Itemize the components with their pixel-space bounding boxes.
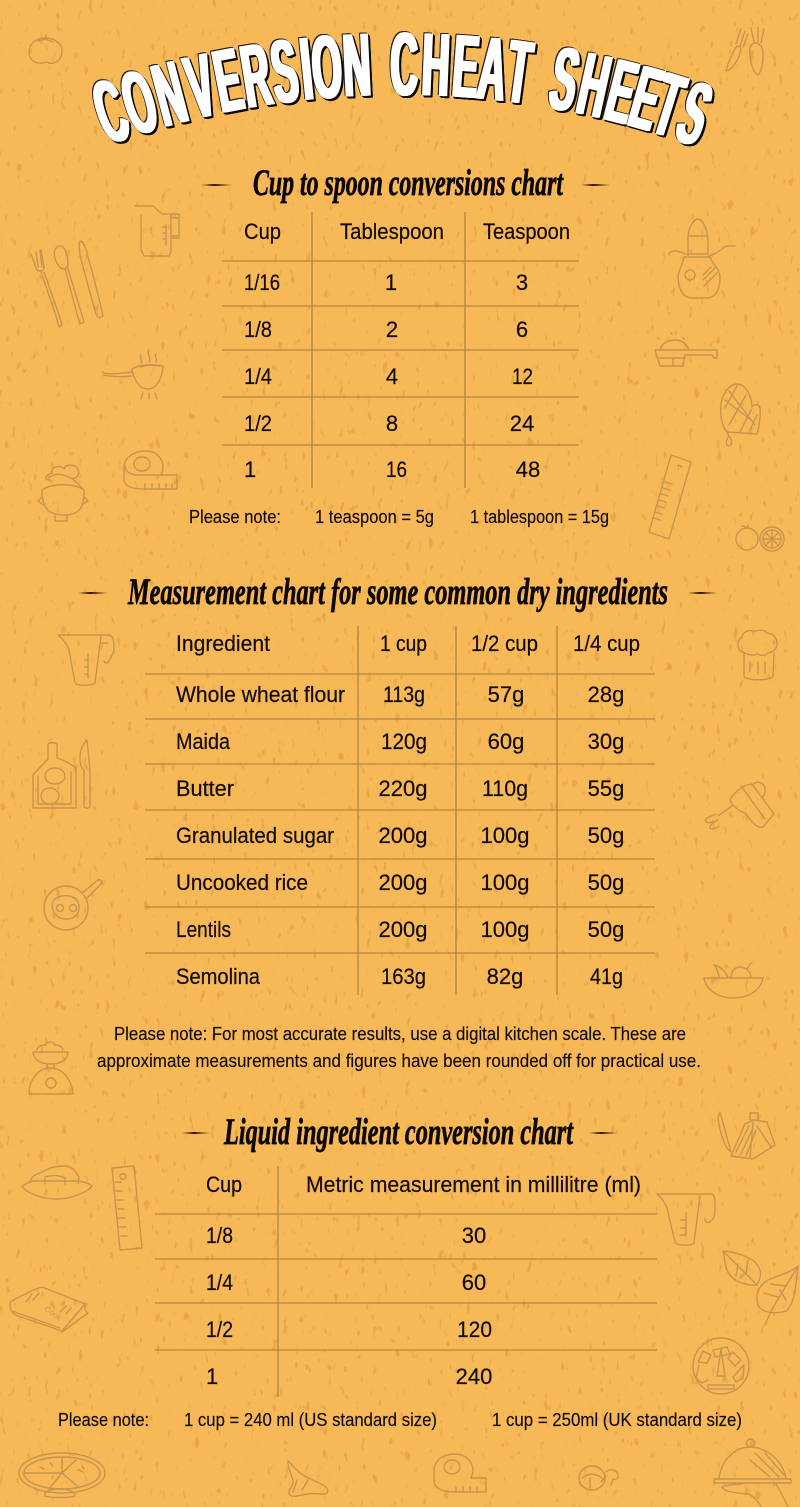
- table: cup to spoon: 16: [386, 457, 407, 482]
- heading: liquid ingredients: Liquid ingredient conversion chart: [223, 1112, 574, 1153]
- table: cup to spoon: [222, 212, 579, 488]
- title: N: [144, 42, 196, 146]
- table: dry ingredients: 100g: [481, 870, 529, 895]
- table: cup to spoon: 6: [516, 317, 528, 342]
- note: accuracy: approximate measurements and figures have been rounded off for practical use.: [97, 1050, 701, 1071]
- table: cup to spoon: 1/8: [244, 317, 272, 342]
- title: O: [111, 50, 168, 155]
- title: O: [309, 16, 346, 118]
- note: cup standards: 1 cup = 250ml (UK standard size): [492, 1409, 742, 1430]
- title: E: [207, 29, 251, 132]
- icon: ruler: [649, 455, 691, 539]
- icon: scoop: [655, 333, 717, 366]
- table: liquid ingredients: 1: [206, 1364, 218, 1389]
- title: S: [667, 62, 723, 165]
- title: H: [570, 34, 619, 137]
- icon: cutlery: [31, 241, 103, 327]
- table: dry ingredients: Whole wheat flour: [176, 682, 345, 707]
- table: dry ingredients: 200g: [379, 870, 427, 895]
- table: dry ingredients: 60g: [488, 729, 524, 754]
- table: dry ingredients: 82g: [487, 964, 523, 989]
- table: liquid ingredients: 30: [462, 1223, 486, 1248]
- table: cup to spoon: 1: [244, 457, 256, 482]
- table: cup to spoon: 24: [510, 411, 534, 436]
- table: dry ingredients: 110g: [482, 776, 528, 801]
- table: cup to spoon: Tablespoon: [340, 219, 444, 244]
- title: R: [235, 24, 278, 127]
- icon: chef hat cup: [738, 630, 777, 680]
- note: spoon weights: 1 tablespoon = 15g: [470, 506, 609, 527]
- icon: serving cloche: [714, 1439, 791, 1507]
- table: dry ingredients: Ingredient: [176, 631, 270, 656]
- table: cup to spoon: 8: [386, 411, 398, 436]
- table: cup to spoon: Teaspoon: [483, 219, 570, 244]
- table: cup to spoon: 1/16: [244, 270, 280, 295]
- table: dry ingredients: 113g: [383, 682, 425, 707]
- table: dry ingredients: 50g: [588, 823, 624, 848]
- title: V: [178, 35, 224, 138]
- table: liquid ingredients: 240: [456, 1364, 492, 1389]
- table: liquid ingredients: 1/8: [206, 1223, 233, 1248]
- table: cup to spoon: Cup: [244, 219, 281, 244]
- note: spoon weights: 1 teaspoon = 5g: [315, 506, 434, 527]
- icon: cook book: [10, 1287, 88, 1332]
- table: liquid ingredients: [155, 1166, 657, 1397]
- title: S: [543, 28, 587, 131]
- table: dry ingredients: 30g: [588, 729, 624, 754]
- title: N: [341, 15, 373, 116]
- title: C: [82, 60, 140, 164]
- table: liquid ingredients: 1/2: [206, 1317, 233, 1342]
- table: dry ingredients: 55g: [588, 776, 624, 801]
- title: E: [598, 40, 647, 144]
- icon: measuring jug 2: [58, 635, 114, 685]
- title: A: [474, 18, 512, 120]
- icon: oven mitt: [721, 384, 760, 446]
- icon: apron: [669, 219, 735, 298]
- table: liquid ingredients: 60: [462, 1270, 486, 1295]
- icon: hand mixer: [705, 782, 774, 829]
- table: cup to spoon: 12: [512, 364, 533, 389]
- icon: gauge dial: [693, 1338, 749, 1394]
- icon: carrots: [726, 27, 764, 75]
- table: cup to spoon: 1: [385, 270, 397, 295]
- table: dry ingredients: [145, 626, 655, 995]
- icon: leaves: [723, 1251, 798, 1325]
- title: H: [421, 14, 452, 116]
- title: S: [266, 20, 304, 123]
- icon: chopping board and knife: [33, 740, 90, 808]
- icon: kitchen scale: [29, 1042, 73, 1094]
- title: T: [502, 21, 538, 124]
- title: T: [643, 54, 695, 157]
- note: accuracy: [97, 1023, 701, 1071]
- table: dry ingredients: 1/2 cup: [471, 631, 538, 656]
- table: liquid ingredients: Cup: [206, 1172, 242, 1197]
- icon: measuring tape 2: [434, 1454, 486, 1492]
- table: cup to spoon: 1/2: [244, 411, 272, 436]
- table: cup to spoon: 2: [386, 317, 398, 342]
- icon: steaming pot: [38, 465, 88, 521]
- table: dry ingredients: Semolina: [176, 964, 261, 989]
- table: cup to spoon: 1/4: [244, 364, 272, 389]
- table: liquid ingredients: 1/4: [206, 1270, 233, 1295]
- icon: tomato: [29, 35, 62, 63]
- table: dry ingredients: 28g: [588, 682, 624, 707]
- table: dry ingredients: 100g: [481, 917, 529, 942]
- icon: strainer: [103, 350, 163, 399]
- title: I: [297, 19, 317, 120]
- table: dry ingredients: 200g: [379, 823, 427, 848]
- note: cup standards: [58, 1409, 742, 1430]
- icon: cook book: Cook: [43, 1304, 64, 1323]
- note: cup standards: Please note:: [58, 1409, 149, 1430]
- icon: measuring jug: [135, 206, 179, 256]
- table: cup to spoon: 3: [516, 270, 528, 295]
- icon: grater and carrot: [718, 1112, 775, 1159]
- table: dry ingredients: 50g: [588, 917, 624, 942]
- table: dry ingredients: Lentils: [176, 917, 231, 942]
- icon: apple and orange: [736, 525, 784, 551]
- icon: measuring tape: [124, 451, 177, 489]
- table: dry ingredients: 50g: [588, 870, 624, 895]
- title: E: [450, 16, 483, 118]
- icon: frying pan with eggs: [44, 880, 102, 930]
- icon: mushrooms: [579, 1466, 618, 1490]
- table: dry ingredients: 41g: [590, 964, 623, 989]
- table: dry ingredients: 220g: [379, 776, 427, 801]
- table: dry ingredients: 163g: [381, 964, 426, 989]
- table: dry ingredients: 100g: [481, 823, 529, 848]
- icon: measuring jug 3: [657, 1194, 715, 1245]
- table: dry ingredients: Maida: [176, 729, 231, 754]
- table: liquid ingredients: Metric measurement in millilitre (ml): [306, 1172, 641, 1197]
- table: dry ingredients: 1 cup: [380, 631, 427, 656]
- icon: fruit bowl: [704, 963, 763, 998]
- title: C: [391, 14, 419, 115]
- icon: pancakes: [22, 1166, 92, 1199]
- note: cup standards: 1 cup = 240 ml (US standard size): [184, 1409, 437, 1430]
- note: accuracy: Please note: For most accurate results, use a digital kitchen scale. These are: [114, 1023, 686, 1044]
- table: dry ingredients: 200g: [379, 917, 427, 942]
- icon: pizza: [19, 1453, 105, 1498]
- icon: ruler 2: [112, 1166, 142, 1250]
- table: cup to spoon: 48: [516, 457, 540, 482]
- title: E: [621, 47, 672, 150]
- note: spoon weights: Please note:: [189, 506, 281, 527]
- table: dry ingredients: 120g: [381, 729, 427, 754]
- note: spoon weights: [189, 506, 609, 527]
- table: dry ingredients: 1/4 cup: [573, 631, 640, 656]
- title: [82, 14, 723, 165]
- table: dry ingredients: Granulated sugar: [176, 823, 334, 848]
- table: cup to spoon: 4: [386, 364, 398, 389]
- table: dry ingredients: Butter: [176, 776, 234, 801]
- icon: mushroom stem: [288, 1461, 328, 1496]
- heading: cup to spoon: Cup to spoon conversions chart: [253, 163, 564, 204]
- table: dry ingredients: 57g: [488, 682, 524, 707]
- table: liquid ingredients: 120: [457, 1317, 492, 1342]
- table: dry ingredients: Uncooked rice: [176, 870, 308, 895]
